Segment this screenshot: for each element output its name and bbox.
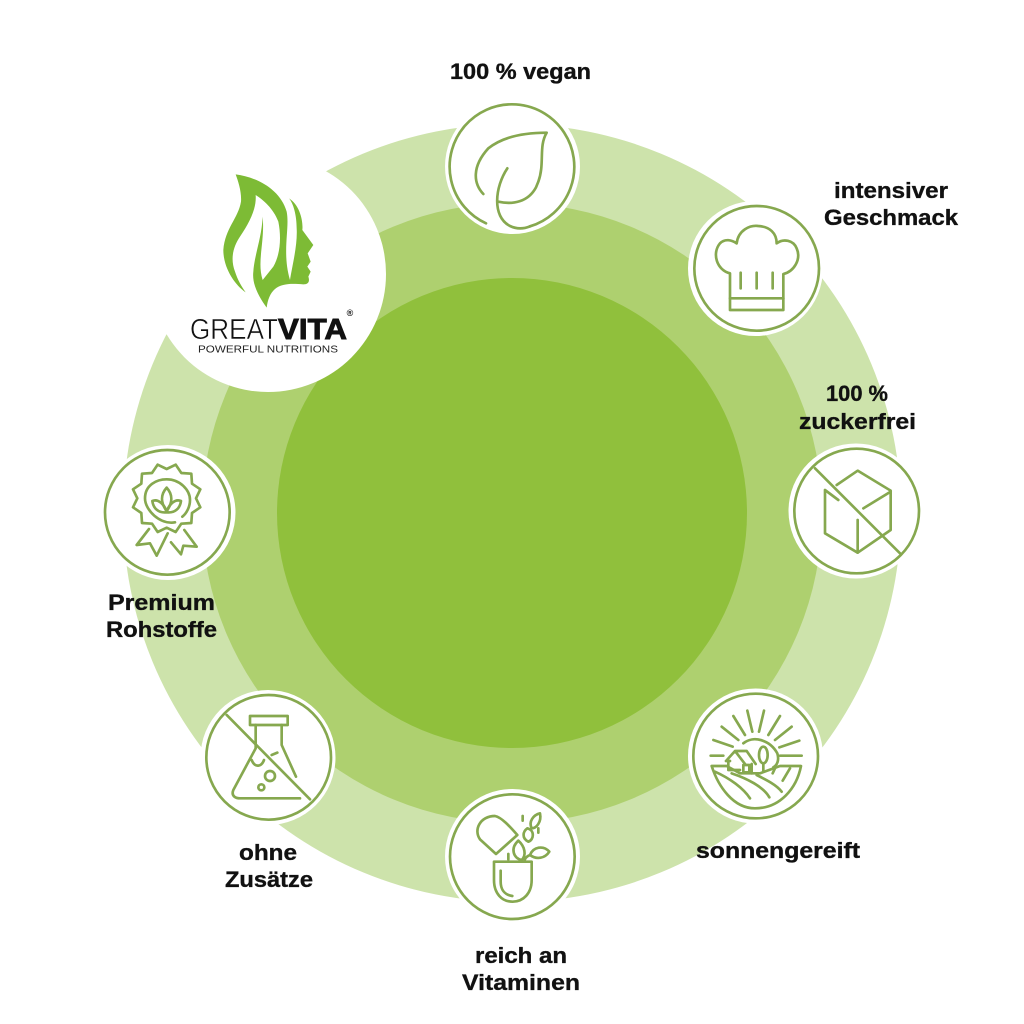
label: intensiver Geschmack: Geschmack [824,205,959,230]
logo wordmark: POWERFUL NUTRITIONS [198,344,338,356]
label: intensiver Geschmack: intensiver [834,178,948,203]
logo wordmark: ® [347,308,354,318]
logo wordmark: GREAT [190,314,278,346]
logo wordmark [190,308,354,356]
outer ring [123,124,901,902]
logo wordmark: VITA [278,314,347,346]
label: reich an Vitaminen [462,943,580,995]
label: ohne Zusätze: Zusätze [225,867,313,892]
label: 100 % zuckerfrei: 100 % [826,381,888,406]
label: Premium Rohstoffe: Rohstoffe [106,617,217,642]
label: reich an Vitaminen: Vitaminen [462,970,580,995]
icon: capsule with herbs (reich an Vitaminen) [445,789,580,924]
label: Premium Rohstoffe [106,590,217,642]
label: sonnengereift: sonnengereift [696,838,861,863]
icon: chef hat (intensiver Geschmack) [688,201,823,336]
label: 100 % vegan: 100 % vegan [450,59,591,84]
icon: crossed flask (ohne Zusätze) [200,690,336,825]
middle ring [202,203,822,823]
icon: quality rosette (Premium Rohstoffe) [100,445,236,580]
logo mark: leaf and face [223,174,313,308]
label: 100 % zuckerfrei [799,381,916,434]
inner circle [277,278,747,748]
icon: sun and farm (sonnengereift) [688,688,823,824]
label: ohne Zusätze [225,840,313,892]
logo [150,156,386,392]
label: reich an Vitaminen: reich an [475,943,567,968]
label: Premium Rohstoffe: Premium [108,590,215,615]
label: ohne Zusätze: ohne [239,840,297,865]
label: intensiver Geschmack [824,178,959,230]
icon: leaf (100 % vegan) [445,99,580,234]
icon: crossed sugar cube (100 % zuckerfrei) [788,444,924,578]
label: 100 % zuckerfrei: zuckerfrei [799,409,916,434]
